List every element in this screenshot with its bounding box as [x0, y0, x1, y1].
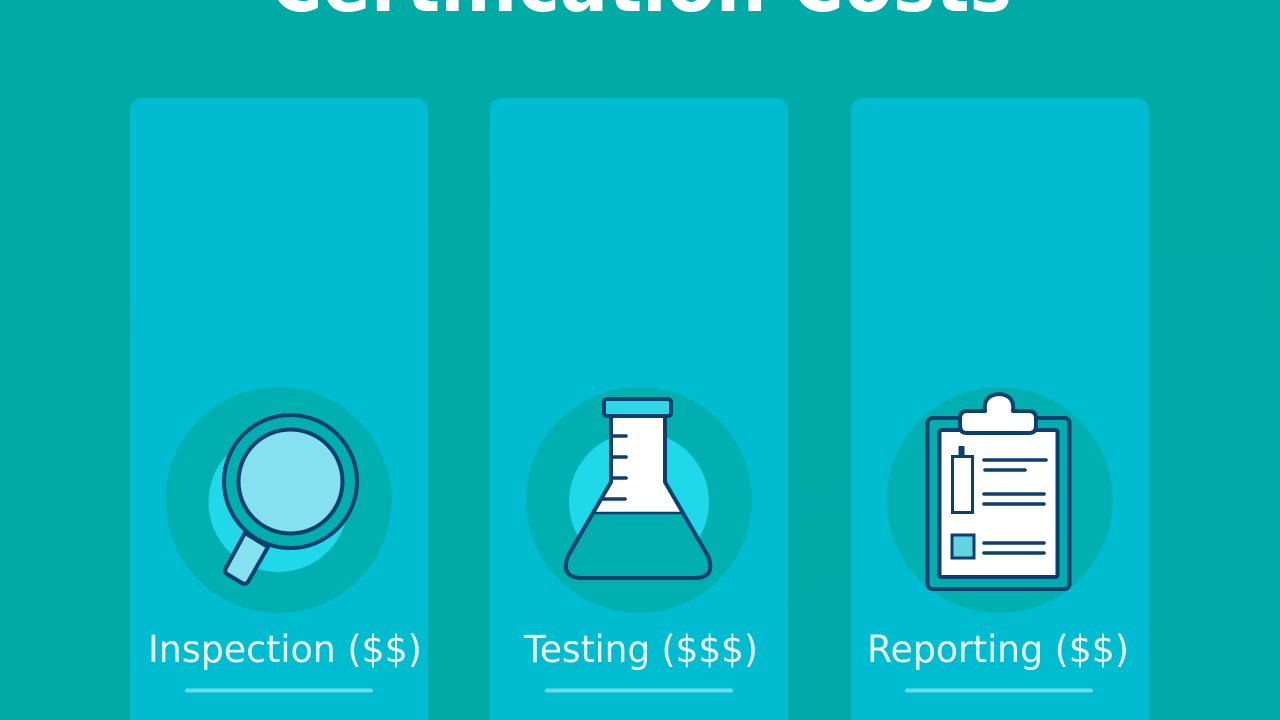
underline: reporting [905, 688, 1093, 692]
label: inspection: Inspection ($$) [148, 628, 422, 671]
panel: inspection [130, 98, 428, 720]
icon: clipboard [886, 387, 1112, 613]
panel: reporting [851, 98, 1149, 720]
underline: inspection [185, 688, 373, 692]
label: testing: Testing ($$$) [523, 628, 758, 671]
label: reporting: Reporting ($$) [867, 628, 1129, 671]
icon: flask [526, 387, 752, 613]
panel: testing [490, 98, 788, 720]
icon: magnifying glass [166, 387, 392, 613]
underline: testing [545, 688, 733, 692]
